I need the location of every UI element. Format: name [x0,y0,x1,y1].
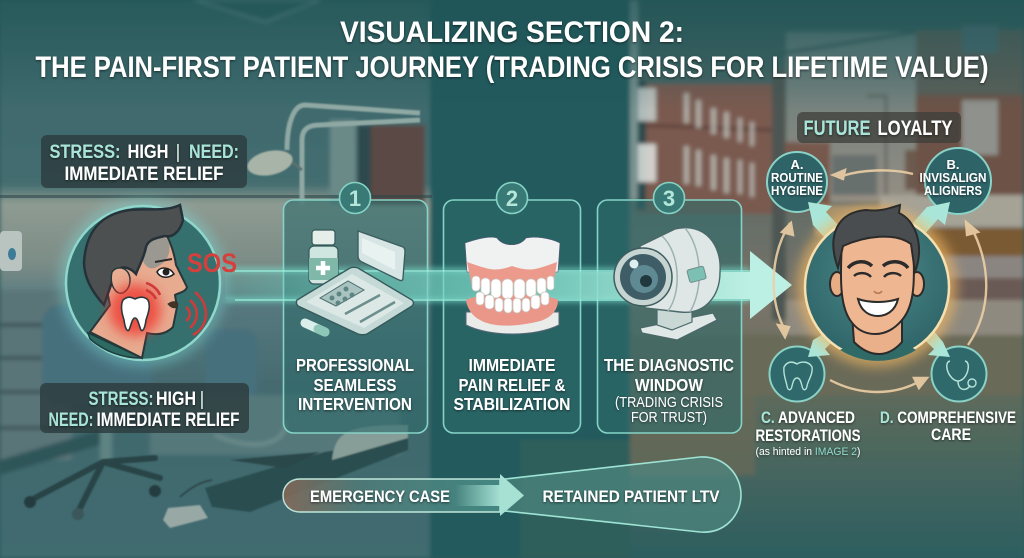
retained patient shape [505,457,741,532]
flow arrow through the journey steps [225,251,792,319]
service: A routine hygiene: HYGIENE [771,183,823,198]
brows and eyes [848,262,908,268]
step 1 contents [296,182,414,414]
step 1 number badge: 1 [349,186,361,211]
heading: future loyalty: FUTURE [804,117,870,140]
hair [833,205,919,272]
step 1 label: SEAMLESS [314,375,396,395]
service: A routine hygiene: A. [790,157,804,172]
pain waves [146,283,206,335]
service: B invisalign aligners: INVISALIGN [920,170,986,185]
heading: future loyalty: LOYALTY [878,117,952,140]
step 1 number badge [340,182,370,214]
step 1 label: INTERVENTION [298,394,412,414]
step 2 label: STABILIZATION [454,394,570,414]
step 3 label: WINDOW [635,375,703,395]
callout: stress and need (top) [41,135,247,188]
callout: stress and need (top): IMMEDIATE RELIEF [64,164,224,185]
arrowhead [750,251,792,319]
service: C advanced restorations icon [770,346,824,402]
patient face and neck [90,232,187,358]
step 2 contents [454,182,570,414]
service arrows from patient to services [808,202,950,357]
bottom flow: emergency case to retained patient LTV: EMERGENCY CASE [310,487,450,506]
ears [830,272,844,296]
panel: happy patient portrait [797,205,957,367]
icon: wall dispenser [0,231,22,271]
service: B invisalign aligners [920,148,991,214]
arrowhead [500,474,524,516]
heading: future loyalty [797,112,961,143]
stool base [24,458,161,520]
label: D comprehensive care: CARE [931,425,971,444]
pill highlight [455,485,501,506]
step 3 number badge: 3 [663,186,675,211]
bottom flow: emergency case to retained patient LTV [283,457,741,532]
step 3 number badge [654,182,684,214]
face [841,234,914,334]
step 1 label: PROFESSIONAL [296,355,414,375]
step 1 label [296,355,414,414]
title: VISUALIZING SECTION 2: [340,16,684,49]
callout: stress and need (bottom): NEED: [48,410,94,431]
patient shoulder [88,333,142,358]
bottom flow: emergency case to retained patient LTV: RETAINED PATIENT LTV [542,487,720,506]
callout: stress and need (bottom): HIGH [156,389,196,410]
step 3 contents [604,182,734,426]
step 2 label: PAIN RELIEF & [458,375,566,395]
label: C advanced restorations: (as hinted in IMAGE 2) [756,446,860,458]
step 2 number badge [496,182,528,214]
callout: stress and need (top): STRESS: [50,142,120,163]
shirt [840,340,916,361]
step 3 label [604,355,734,426]
step 2 number badge: 2 [506,186,518,211]
callout: stress and need (bottom): | [200,389,204,410]
patient ear [111,268,130,293]
emergency case pill [283,479,500,512]
label: C advanced restorations: RESTORATIONS [756,426,860,445]
panel: step 3 card [598,200,742,433]
patient eye [157,268,174,277]
panel: step 2 card [444,200,580,433]
SOS label: SOS [187,248,237,278]
service: B invisalign aligners: B. [946,157,960,172]
callout: stress and need (top): NEED: [189,142,239,163]
loop arrows between services [774,170,986,392]
step 2 label [454,355,570,414]
step 3 label: FOR TRUST) [631,409,707,426]
icon: dental lamp arm [245,105,420,205]
service: D comprehensive care icon [932,346,986,402]
smile [858,299,898,316]
foot pedal [163,480,212,528]
icon: aching tooth [121,297,149,331]
callout: stress and need (bottom) [40,383,249,433]
icon: dental mirror [358,231,405,281]
callout: stress and need (bottom): STRESS: [88,389,154,410]
label: C advanced restorations: C. ADVANCED [761,408,855,427]
panel: step 1 card [284,200,428,433]
step 3 label: (TRADING CRISIS [615,394,723,411]
panel: stressed patient portrait [59,199,237,367]
icon: diagnostic camera [614,228,720,340]
callout: stress and need (top): | [176,142,180,163]
label: D comprehensive care [880,408,1016,444]
chair footrest [205,425,408,512]
icon: capsule [305,323,325,332]
icon: medicine bottle [309,230,338,284]
title [36,16,988,84]
label: C advanced restorations [756,408,860,458]
pain glow [109,284,161,336]
icon: dental model [465,237,560,334]
patient hair [84,205,183,305]
icon: instrument tray [296,267,414,335]
step 2 label: IMMEDIATE [468,355,556,375]
callout: stress and need (top): HIGH [128,142,168,163]
neck [852,315,902,354]
service: A routine hygiene: ROUTINE [771,170,823,185]
service: A routine hygiene [767,152,827,212]
patient mouth [168,302,178,308]
callout: stress and need (bottom): IMMEDIATE RELIEF [96,410,240,431]
step 3 label: THE DIAGNOSTIC [604,355,734,375]
service: B invisalign aligners: ALIGNERS [924,183,982,198]
